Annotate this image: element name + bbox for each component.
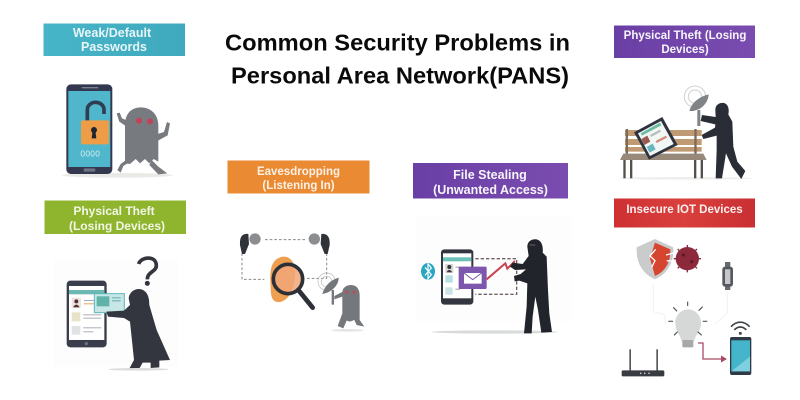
heading: physical theft: (Losing Devices) xyxy=(69,219,165,233)
heading: insecure IOT devices: Insecure IOT Devices xyxy=(626,204,743,216)
panel: insecure IOT devices xyxy=(614,198,755,376)
icon: bench with tablet xyxy=(620,117,753,180)
heading: physical theft (losing devices): Physical Theft (Losing xyxy=(624,30,746,42)
heading: weak/default passwords xyxy=(44,24,185,56)
icon: bluetooth, phone, envelope and thief xyxy=(417,215,572,334)
heading: weak/default passwords: Weak/Default xyxy=(73,26,152,40)
icon: earbuds, ear and magnifier xyxy=(240,233,330,308)
icon: smart band xyxy=(722,262,733,290)
arrow: bulb to phone xyxy=(698,343,727,362)
icon: cracked shield and virus xyxy=(637,239,701,279)
heading: physical theft: Physical Theft xyxy=(73,204,155,218)
heading: insecure IOT devices xyxy=(614,198,755,228)
icon: phone with open padlock xyxy=(62,84,173,178)
title xyxy=(225,30,570,88)
title: Personal Area Network(PANS) xyxy=(231,62,569,88)
panel: physical theft (green) xyxy=(44,200,186,371)
heading: weak/default passwords: Passwords xyxy=(81,40,147,54)
title: Common Security Problems in xyxy=(225,30,570,56)
panel: file stealing xyxy=(413,163,572,334)
panel: eavesdropping xyxy=(228,160,370,332)
panel: weak/default passwords xyxy=(44,24,185,178)
heading: physical theft (losing devices): Devices) xyxy=(661,44,709,56)
panel: physical theft (purple) xyxy=(614,26,755,180)
heading: file stealing: File Stealing xyxy=(453,168,527,182)
icon: router xyxy=(622,349,664,376)
icon: phone with wifi xyxy=(730,322,751,375)
heading: physical theft xyxy=(44,200,186,234)
heading: file stealing: (Unwanted Access) xyxy=(433,183,548,197)
icon: connection lines xyxy=(653,283,727,324)
icon: thief with satellite dish xyxy=(684,86,745,179)
heading: eavesdropping xyxy=(228,160,370,194)
icon: phone held by hooded thief xyxy=(53,258,178,371)
heading: physical theft (losing devices) xyxy=(614,26,755,58)
icon: ghost with satellite dish xyxy=(318,273,364,332)
icon: light bulb xyxy=(668,302,707,347)
heading: eavesdropping: (Listening In) xyxy=(262,180,335,192)
heading: eavesdropping: Eavesdropping xyxy=(257,166,340,178)
icon: phone with open padlock: 0000 xyxy=(80,148,100,158)
heading: file stealing xyxy=(413,163,568,198)
icon: ghost attacker xyxy=(117,107,170,174)
